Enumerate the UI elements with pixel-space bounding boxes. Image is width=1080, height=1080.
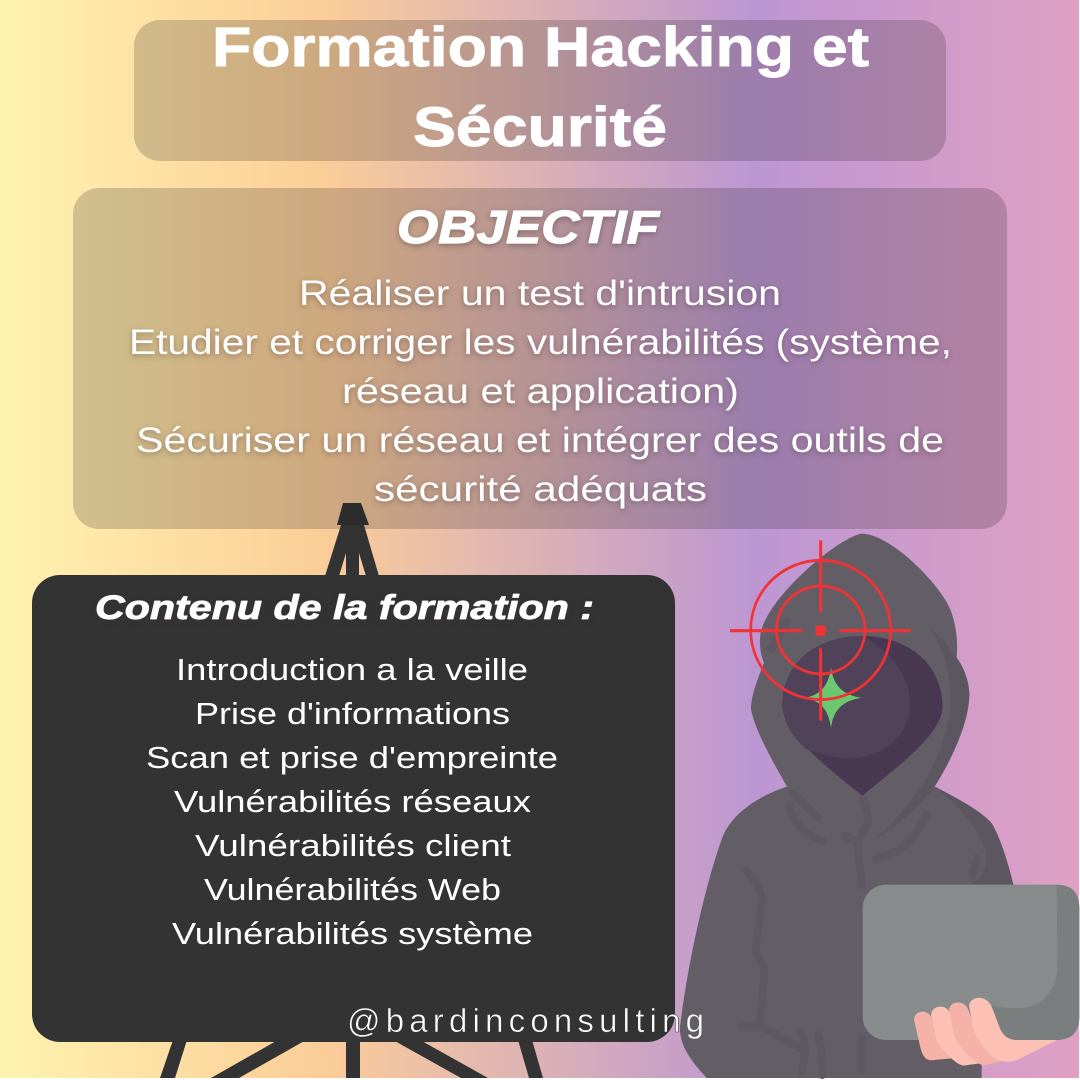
- hood: [730, 534, 969, 840]
- title panel: [134, 15, 946, 161]
- course list: Vulnérabilités client: [195, 828, 511, 863]
- objectif text block: [129, 274, 952, 509]
- course list: [146, 652, 558, 951]
- course list: Scan et prise d'empreinte: [146, 740, 558, 775]
- hoodie fold lines: [742, 793, 978, 1075]
- panel: contenu de la formation board: [32, 575, 675, 1042]
- objectif text block: Etudier et corriger les vulnérabilités (système,: [129, 323, 952, 362]
- easel legs and top: [160, 503, 543, 1078]
- course list: Prise d'informations: [195, 696, 510, 731]
- objectif text block: Réaliser un test d'intrusion: [299, 274, 781, 313]
- panel: objectif: [73, 188, 1007, 529]
- hoodie body and folds: [680, 787, 1013, 1078]
- objectif text block: Sécuriser un réseau et intégrer des outils de: [136, 421, 944, 460]
- board heading: Contenu de la formation :: [95, 589, 594, 627]
- course list: Vulnérabilités Web: [204, 872, 501, 907]
- course list: Vulnérabilités réseaux: [174, 784, 532, 819]
- objectif text block: sécurité adéquats: [374, 470, 707, 509]
- course list: Vulnérabilités système: [172, 916, 533, 951]
- target crosshair: [730, 540, 911, 721]
- objectif heading: OBJECTIF: [397, 201, 661, 253]
- title: Sécurité: [413, 95, 667, 158]
- hood crease: [772, 622, 787, 648]
- tablet: [863, 885, 1079, 1040]
- handle text: @bardinconsulting: [347, 1002, 704, 1039]
- hand: [914, 998, 1057, 1066]
- green star: [805, 667, 862, 728]
- face highlight: [782, 636, 910, 758]
- title: [212, 15, 869, 158]
- face opening: [782, 636, 943, 796]
- course list: Introduction a la veille: [176, 652, 528, 687]
- hacker illustration: [680, 534, 1079, 1078]
- title: Formation Hacking et: [212, 15, 869, 78]
- objectif text block: réseau et application): [342, 372, 739, 411]
- hood shadow: [875, 627, 969, 840]
